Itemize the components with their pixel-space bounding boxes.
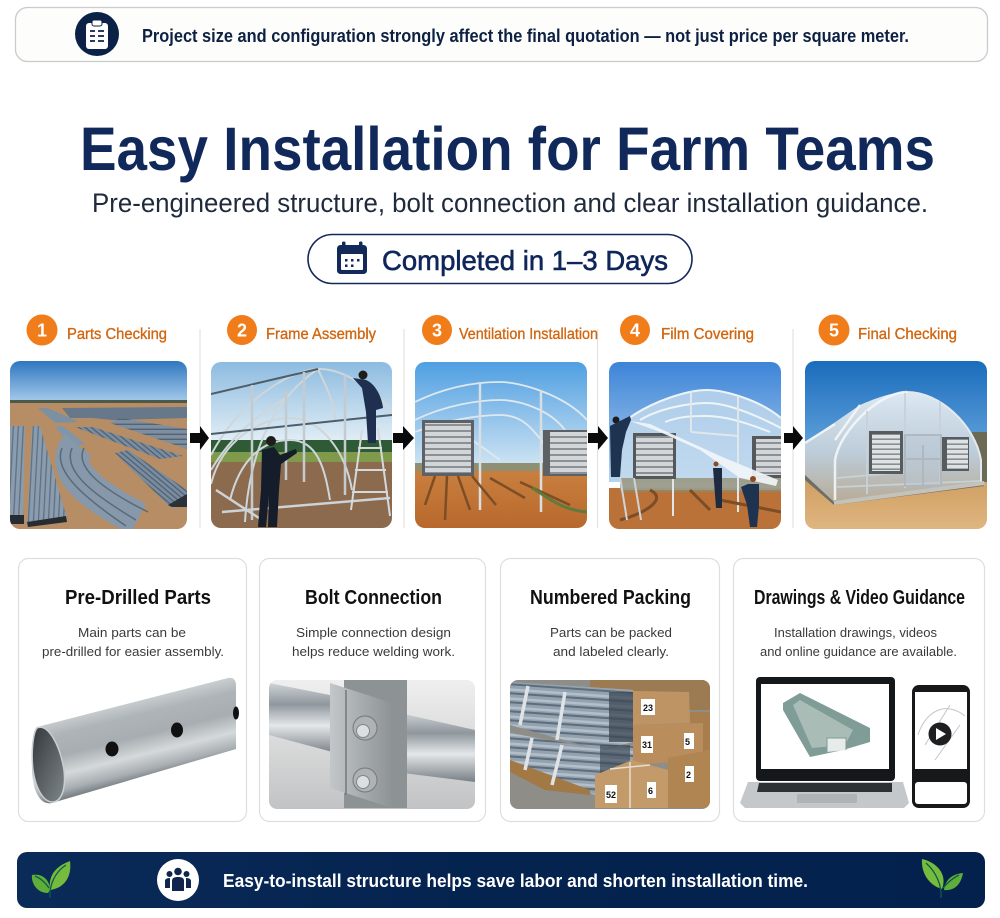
image: phone with play button xyxy=(912,685,970,808)
number labels: 6 xyxy=(648,786,653,796)
card description: Parts can be packed xyxy=(550,625,672,640)
bottom banner xyxy=(17,852,985,908)
notice text: Project size and configuration strongly affect the final quotation — not just price per square meter. xyxy=(142,26,909,46)
card description xyxy=(760,625,957,659)
card description: and labeled clearly. xyxy=(553,644,669,659)
step 1 photo: stacked pipes on site xyxy=(10,361,187,529)
arrow: step 2 to 3 xyxy=(393,426,414,450)
step 4 heading: 4 xyxy=(630,320,640,340)
step 2 photo: workers assembling frame xyxy=(211,362,392,528)
arrow: step 1 to 2 xyxy=(190,426,209,450)
top notice bar xyxy=(16,8,988,62)
fans on greenhouse xyxy=(869,431,969,474)
step 3 heading xyxy=(422,315,598,345)
worker and ladder xyxy=(351,370,390,516)
number labels: 23 xyxy=(643,703,653,713)
feature card: drawings and video guidance xyxy=(734,558,984,822)
step 4 heading: Film Covering xyxy=(661,326,754,343)
arrow: step 3 to 4 xyxy=(588,426,608,450)
worker on ground xyxy=(258,436,297,527)
foundation xyxy=(805,475,984,505)
step 5 heading: 5 xyxy=(829,320,839,340)
right fan xyxy=(752,436,782,478)
cardboard boxes xyxy=(595,691,710,808)
right fan xyxy=(543,430,589,476)
step 4 heading xyxy=(620,315,754,345)
card description: helps reduce welding work. xyxy=(292,644,455,659)
number labels: 2 xyxy=(686,770,691,780)
step 3 heading: Ventilation Installation xyxy=(459,326,598,343)
feature card: bolt connection xyxy=(260,558,486,822)
card heading: Pre-Drilled Parts xyxy=(65,587,211,609)
card heading: Numbered Packing xyxy=(530,587,691,609)
card description xyxy=(292,625,455,659)
icon: right leaves xyxy=(922,859,963,898)
step 3: ventilation installation xyxy=(415,315,598,528)
step 4 photo: workers covering film xyxy=(609,362,782,529)
subtitle: Pre-engineered structure, bolt connection and clear installation guidance. xyxy=(92,188,928,218)
icon: team xyxy=(157,859,199,901)
step 5 photo: finished greenhouse xyxy=(805,361,987,529)
card description: Simple connection design xyxy=(296,625,451,640)
number labels: 31 xyxy=(642,740,652,750)
step 5 heading: Final Checking xyxy=(858,326,957,343)
image: galvanized drilled pipe xyxy=(32,678,239,803)
step 1 heading: Parts Checking xyxy=(67,326,167,343)
icon: clipboard xyxy=(75,12,119,56)
image: laptop with greenhouse drawing xyxy=(740,677,909,808)
icon: calendar xyxy=(337,242,367,274)
step 1 heading xyxy=(26,314,167,346)
step 1: parts checking xyxy=(10,314,187,529)
left fan xyxy=(633,433,676,479)
step 2 heading xyxy=(227,315,376,345)
arrow: step 4 to 5 xyxy=(784,426,803,450)
card description xyxy=(550,625,672,659)
card description xyxy=(42,625,224,659)
card description: Main parts can be xyxy=(78,625,186,640)
step 1 heading: 1 xyxy=(37,320,47,340)
image: bolted clamp on pipes xyxy=(269,680,475,809)
step 2: frame assembly xyxy=(211,315,392,528)
step 5: final checking xyxy=(805,314,987,529)
step 5 heading xyxy=(818,314,957,346)
pill text: Completed in 1–3 Days xyxy=(382,245,668,276)
duration pill xyxy=(308,234,692,284)
step 3 photo: ventilation fans on frame xyxy=(415,362,589,528)
image: packed pipes and boxes xyxy=(510,680,710,809)
number labels: 5 xyxy=(685,737,690,747)
card heading: Bolt Connection xyxy=(305,587,442,609)
step 4: film covering xyxy=(609,315,782,529)
bolts xyxy=(353,716,377,792)
card description: pre-drilled for easier assembly. xyxy=(42,644,224,659)
workers on film xyxy=(610,416,759,527)
film sheet xyxy=(630,421,778,486)
feature card: pre-drilled parts xyxy=(18,558,246,822)
icon: left leaves xyxy=(32,861,70,898)
card description: Installation drawings, videos xyxy=(774,625,937,640)
step 2 heading: 2 xyxy=(237,320,247,340)
number labels xyxy=(605,699,694,803)
feature card: numbered packing xyxy=(500,558,720,822)
left fan xyxy=(422,420,474,476)
step 2 heading: Frame Assembly xyxy=(266,326,376,343)
number labels: 52 xyxy=(606,790,616,800)
banner text: Easy-to-install structure helps save labor and shorten installation time. xyxy=(223,870,808,891)
step 3 heading: 3 xyxy=(432,320,442,340)
card description: and online guidance are available. xyxy=(760,644,957,659)
drilled holes xyxy=(106,706,239,756)
